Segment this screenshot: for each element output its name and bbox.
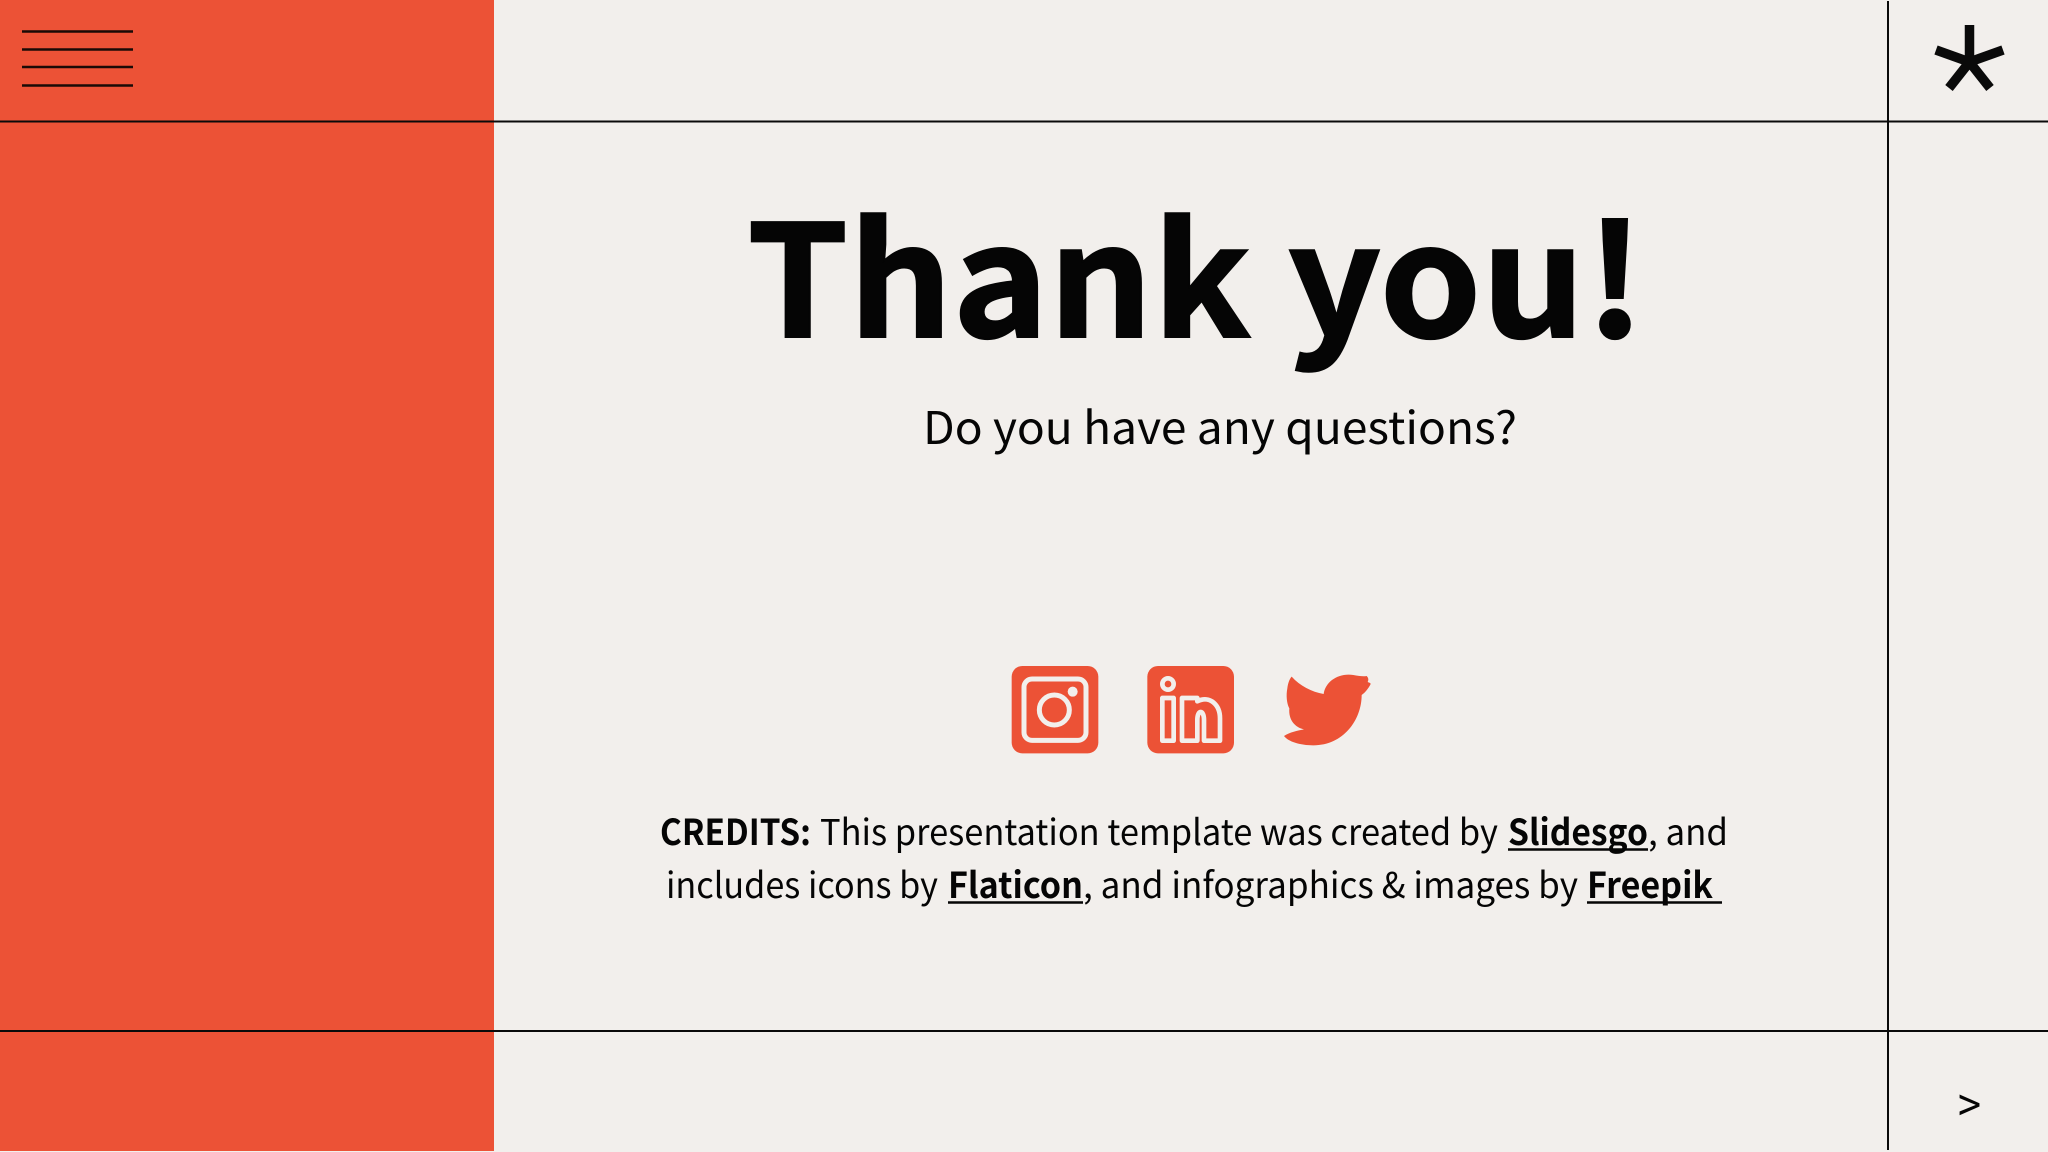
- subtitle: Do you have any questions?: [923, 392, 1517, 457]
- icon: instagram: [1012, 666, 1098, 753]
- icon: asterisk: [1936, 25, 2003, 88]
- text block: credits: CREDITS:: [660, 805, 811, 856]
- panel: orange side band: [0, 0, 494, 1151]
- text block: credits: [660, 805, 1728, 909]
- icon: twitter: [1284, 675, 1371, 745]
- text block: credits: This presentation template was created by: [820, 805, 1498, 856]
- icon: menu lines: [22, 32, 133, 86]
- icon: linkedin: [1147, 666, 1234, 753]
- link: Slidesgo: Slidesgo: [1508, 805, 1648, 856]
- link: Flaticon: Flaticon: [948, 858, 1083, 909]
- text block: credits: , and: [1648, 805, 1728, 856]
- link: Freepik: Freepik: [1587, 858, 1714, 909]
- title: Thank you!: [747, 157, 1645, 382]
- text block: credits: , and infographics & images by: [1083, 858, 1578, 909]
- text block: credits: includes icons by: [666, 858, 938, 909]
- next arrow glyph: >: [1958, 1070, 1981, 1136]
